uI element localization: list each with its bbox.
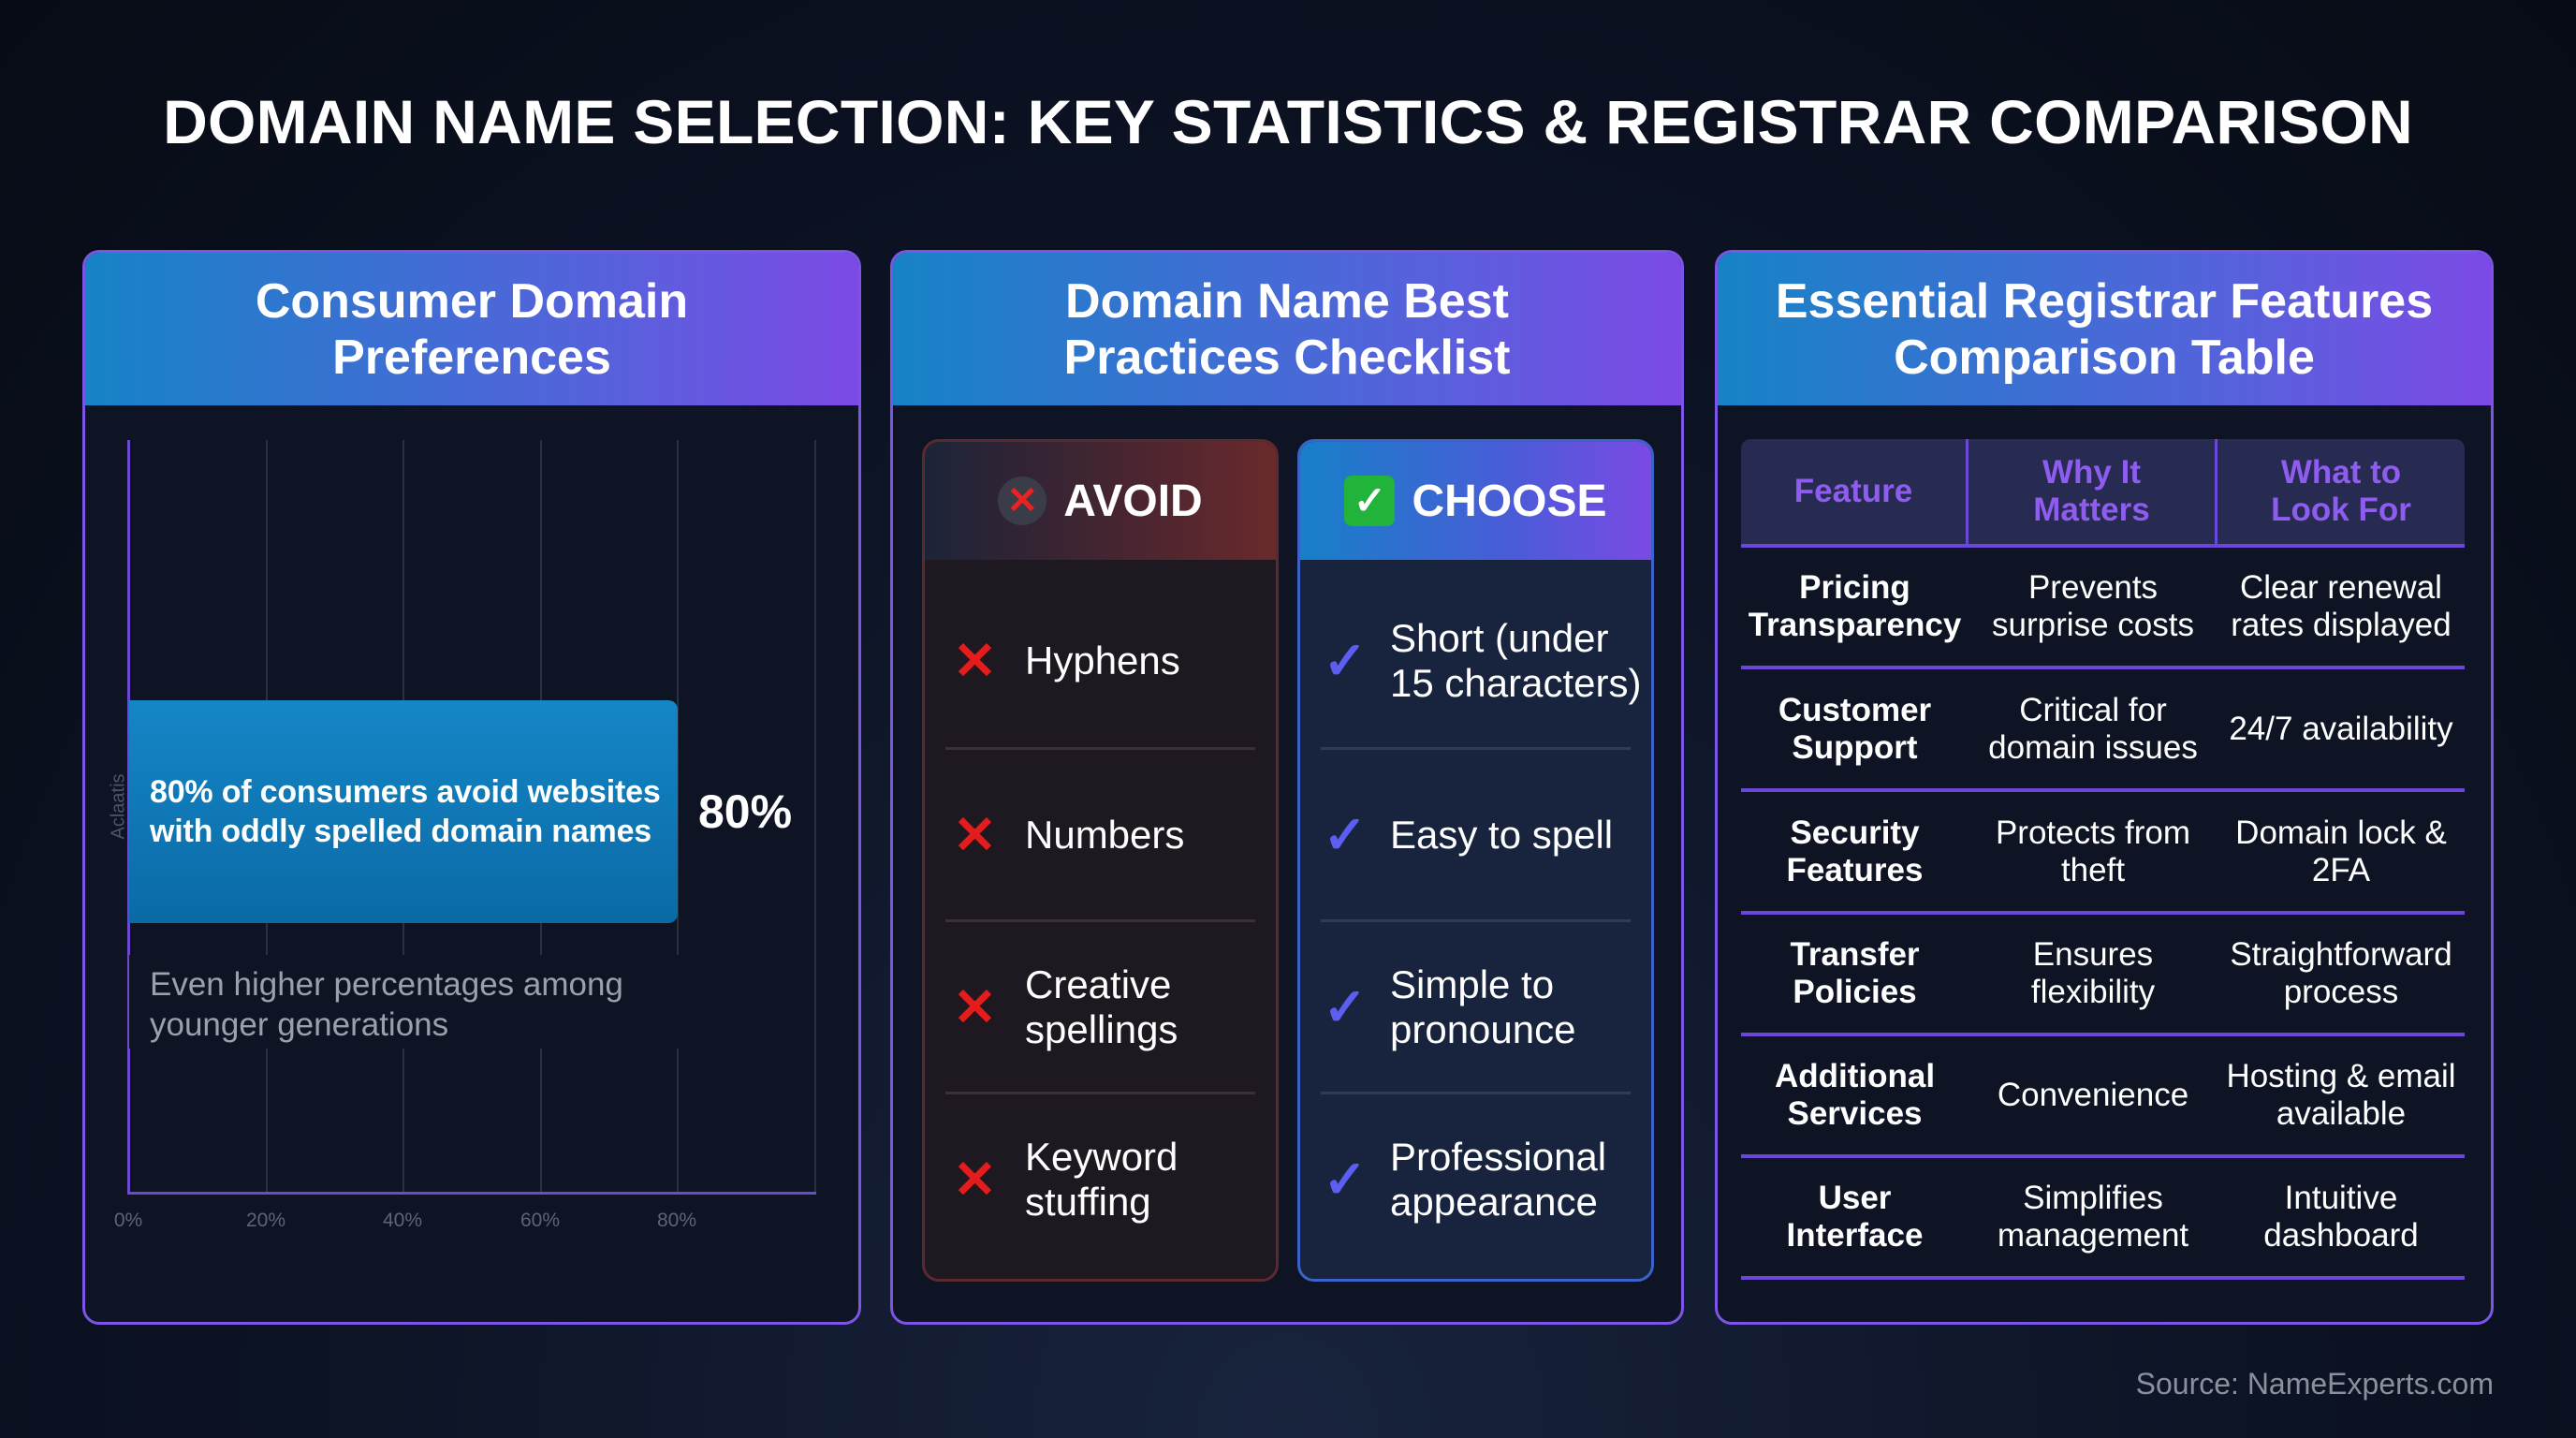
bar: 80%: with oddly spelled domain names (150, 814, 651, 849)
comparison table: Additional (1775, 1058, 1935, 1094)
comparison table: flexibility (2031, 974, 2155, 1010)
axis label: Aclaatis (109, 773, 129, 840)
comparison table: Transparency (1749, 607, 1961, 643)
card: avoid: Creative (1025, 962, 1171, 1006)
bar chart (109, 440, 816, 1195)
card: avoid: stuffing (1025, 1180, 1151, 1224)
comparison table: Ensures (2033, 936, 2153, 973)
comparison table: surprise costs (1992, 607, 2194, 643)
comparison table: management (1998, 1217, 2188, 1254)
bar: 80%: 80% of consumers avoid websites (150, 774, 661, 810)
choose header (1300, 442, 1651, 560)
comparison table: Protects from (1996, 814, 2190, 850)
text: 40% (383, 1210, 422, 1231)
comparison table: User (1819, 1180, 1891, 1216)
panel: consumer domain preferences (82, 250, 861, 1325)
choose header: ✓ (1354, 478, 1386, 522)
card: avoid: ✕ (953, 977, 997, 1036)
panel heading: Consumer Domain (256, 273, 688, 328)
card: choose: appearance (1390, 1180, 1598, 1224)
comparison table: available (2276, 1095, 2406, 1132)
card: choose: ✓ (1324, 631, 1367, 690)
card: avoid: ✕ (953, 1150, 997, 1209)
comparison table: Intuitive (2285, 1180, 2397, 1216)
comparison table: Critical for (2019, 691, 2167, 728)
panel heading: Domain Name Best (1065, 273, 1509, 328)
panel heading (85, 253, 858, 405)
avoid header (925, 442, 1276, 560)
panel heading: Practices Checklist (1064, 330, 1510, 384)
card: avoid: Numbers (1025, 813, 1184, 857)
comparison table: dashboard (2263, 1217, 2419, 1254)
table header: What to (2281, 454, 2401, 491)
comparison table: Simplifies (2023, 1180, 2163, 1216)
comparison table: Prevents (2028, 569, 2158, 606)
panel: best practices checklist (890, 250, 1684, 1325)
comparison table: 24/7 availability (2229, 710, 2453, 747)
comparison table: process (2284, 974, 2398, 1010)
comparison table: Domain lock & (2235, 814, 2447, 850)
panel: registrar features comparison table (1715, 250, 2494, 1325)
table header (1741, 439, 2465, 548)
comparison table: Interface (1787, 1217, 1923, 1254)
card: choose: Easy to spell (1390, 813, 1613, 857)
table header: Why It (2042, 454, 2141, 491)
comparison table: Features (1787, 852, 1923, 888)
panel heading: Comparison Table (1894, 330, 2315, 384)
bar: 80% (129, 700, 678, 923)
source note: Source: NameExperts.com (2136, 1367, 2494, 1401)
avoid header: AVOID (1063, 476, 1203, 526)
comparison table: theft (2061, 852, 2125, 888)
card: choose: ✓ (1324, 805, 1367, 864)
comparison table: domain issues (1988, 728, 2198, 766)
card: choose: ✓ (1324, 977, 1367, 1036)
card: choose: Professional (1390, 1135, 1606, 1179)
comparison table: Support (1792, 728, 1918, 766)
card: choose: Simple to (1390, 962, 1554, 1006)
panel heading (1718, 253, 2491, 405)
choose header: CHOOSE (1412, 476, 1607, 526)
value label: 80% (698, 785, 792, 838)
comparison table (1741, 439, 2465, 1280)
comparison table: Services (1787, 1095, 1923, 1132)
card: choose: Short (under (1390, 616, 1608, 660)
table header: Look For (2271, 492, 2411, 528)
comparison table: Straightforward (2230, 936, 2452, 973)
card: choose: pronounce (1390, 1007, 1576, 1051)
title: DOMAIN NAME SELECTION: KEY STATISTICS & REGISTRAR COMPARISON (163, 87, 2413, 156)
text: 20% (246, 1210, 285, 1231)
card: choose (1297, 439, 1654, 1282)
panel heading (893, 253, 1681, 405)
comparison table: Clear renewal (2240, 569, 2442, 606)
card: avoid: ✕ (953, 631, 997, 690)
card: choose: 15 characters) (1390, 661, 1641, 705)
comparison table: Customer (1778, 691, 1931, 728)
comparison table: Transfer (1790, 936, 1920, 973)
card: avoid (922, 439, 1279, 1282)
text: 80% (657, 1210, 696, 1231)
avoid header: ✕ (1007, 480, 1038, 521)
text: 60% (520, 1210, 560, 1231)
card: avoid: ✕ (953, 805, 997, 864)
note text (129, 955, 784, 1049)
text: 0% (114, 1210, 142, 1231)
comparison table: Hosting & email (2226, 1058, 2456, 1094)
table header: Feature (1794, 473, 1912, 509)
comparison table: Pricing (1799, 569, 1910, 606)
card: choose: ✓ (1324, 1150, 1367, 1209)
comparison table: rates displayed (2231, 607, 2452, 643)
panel heading: Preferences (332, 330, 611, 384)
note text: younger generations (150, 1006, 448, 1043)
panel heading: Essential Registrar Features (1776, 273, 2433, 328)
card: avoid: spellings (1025, 1007, 1178, 1051)
axis ticks (114, 1210, 696, 1231)
comparison table: 2FA (2312, 852, 2370, 888)
card: avoid: Hyphens (1025, 638, 1180, 682)
note text: Even higher percentages among (150, 966, 623, 1003)
table header: Matters (2033, 492, 2150, 528)
card: avoid: Keyword (1025, 1135, 1178, 1179)
comparison table: Policies (1793, 974, 1917, 1010)
comparison table: Convenience (1998, 1077, 2188, 1113)
comparison table: Security (1790, 814, 1920, 850)
